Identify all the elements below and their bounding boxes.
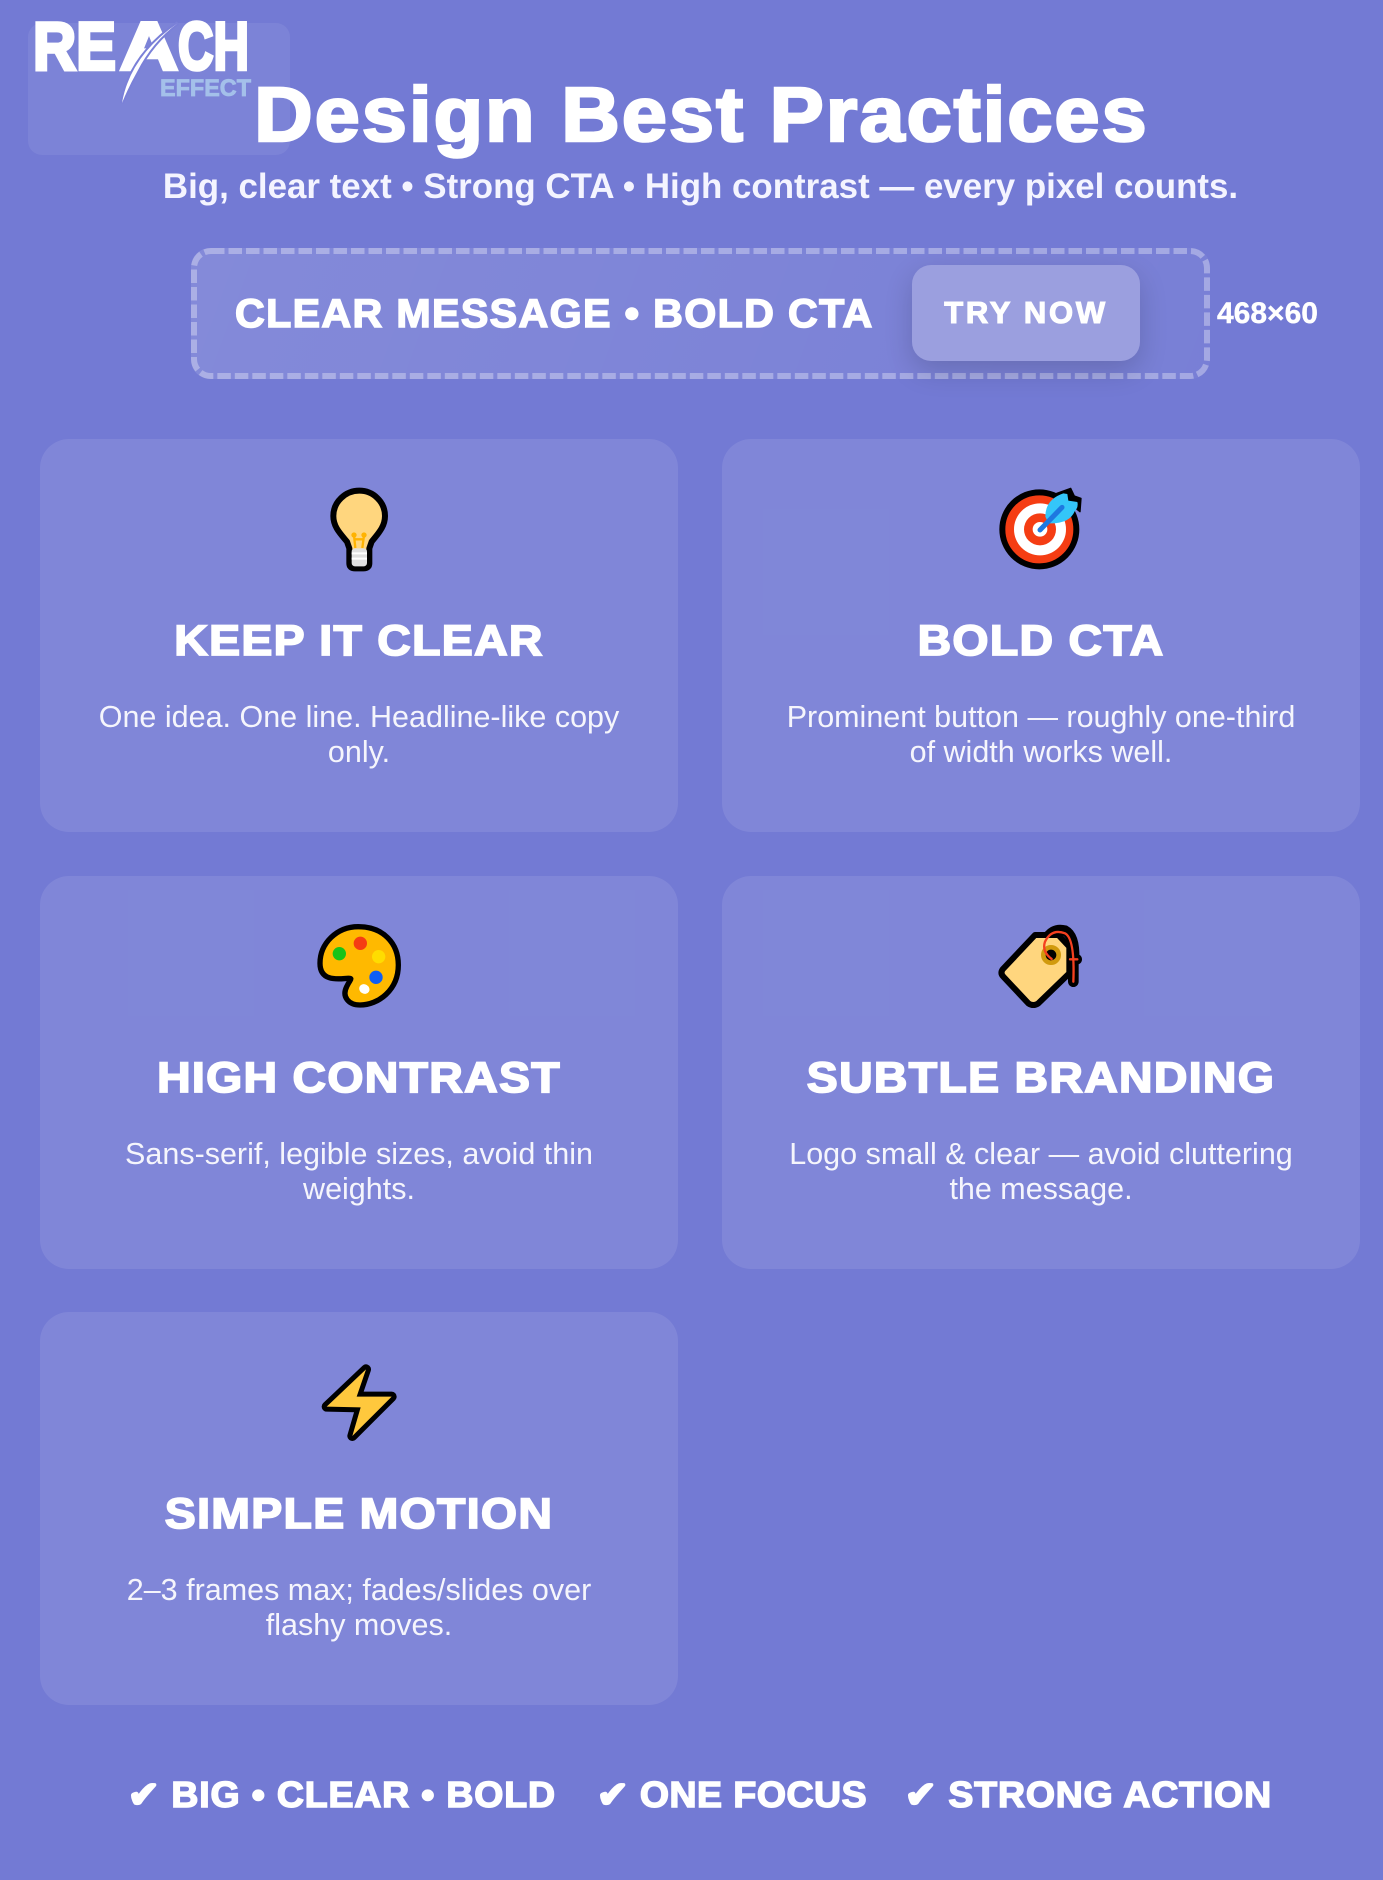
card heading: SUBTLE BRANDING bbox=[807, 1054, 1275, 1102]
logo wordmark: A bbox=[120, 8, 178, 84]
title: Design Best Practices bbox=[254, 72, 1149, 158]
card text: the message. bbox=[949, 1172, 1133, 1206]
card text: Logo small & clear — avoid cluttering bbox=[789, 1137, 1293, 1171]
panel: simple motion bbox=[40, 1312, 678, 1704]
panel: keep it clear bbox=[40, 439, 678, 832]
card text bbox=[787, 700, 1295, 769]
banner button: TRY NOW bbox=[944, 295, 1108, 330]
panel: high contrast bbox=[40, 876, 678, 1268]
card heading: HIGH CONTRAST bbox=[157, 1054, 561, 1102]
card text: One idea. One line. Headline-like copy bbox=[99, 700, 619, 734]
logo wordmark: CH bbox=[178, 8, 249, 84]
card text: 2–3 frames max; fades/slides over bbox=[127, 1573, 591, 1607]
check item one: ✔ BIG • CLEAR • BOLD bbox=[128, 1774, 556, 1815]
icon: target with dart bbox=[999, 488, 1082, 570]
logo wordmark: EFFECT bbox=[160, 75, 251, 102]
icon: paint palette bbox=[317, 924, 401, 1008]
card text: of width works well. bbox=[910, 735, 1172, 769]
icon: price tag bbox=[998, 924, 1082, 1008]
logo wordmark bbox=[33, 8, 252, 103]
card text: weights. bbox=[303, 1172, 415, 1206]
panel: bold cta bbox=[722, 439, 1360, 832]
panel: subtle branding bbox=[722, 876, 1360, 1268]
check item three: ✔ STRONG ACTION bbox=[905, 1774, 1272, 1815]
card heading: KEEP IT CLEAR bbox=[174, 617, 544, 665]
card text: flashy moves. bbox=[266, 1608, 452, 1642]
logo background panel bbox=[28, 23, 290, 155]
subtitle: Big, clear text • Strong CTA • High contrast — every pixel counts. bbox=[163, 167, 1238, 206]
size label: 468×60 bbox=[1217, 297, 1318, 330]
icon: lightning bolt bbox=[322, 1364, 397, 1441]
card text bbox=[127, 1573, 591, 1642]
card text bbox=[125, 1137, 593, 1206]
logo wordmark: RE bbox=[33, 8, 116, 84]
card text: Sans-serif, legible sizes, avoid thin bbox=[125, 1137, 593, 1171]
logo bbox=[28, 8, 290, 155]
card text: Prominent button — roughly one-third bbox=[787, 700, 1295, 734]
icon: light bulb bbox=[330, 488, 388, 572]
banner example bbox=[191, 248, 1210, 379]
card heading: BOLD CTA bbox=[918, 617, 1164, 665]
banner message: CLEAR MESSAGE • BOLD CTA bbox=[235, 292, 874, 336]
card heading: SIMPLE MOTION bbox=[165, 1490, 553, 1538]
card text: only. bbox=[328, 735, 390, 769]
check item two: ✔ ONE FOCUS bbox=[597, 1774, 867, 1815]
card text bbox=[99, 700, 620, 769]
banner button bbox=[912, 265, 1140, 361]
banner dashed border bbox=[191, 248, 1210, 379]
footer checklist bbox=[128, 1774, 1272, 1815]
card text bbox=[789, 1137, 1293, 1206]
